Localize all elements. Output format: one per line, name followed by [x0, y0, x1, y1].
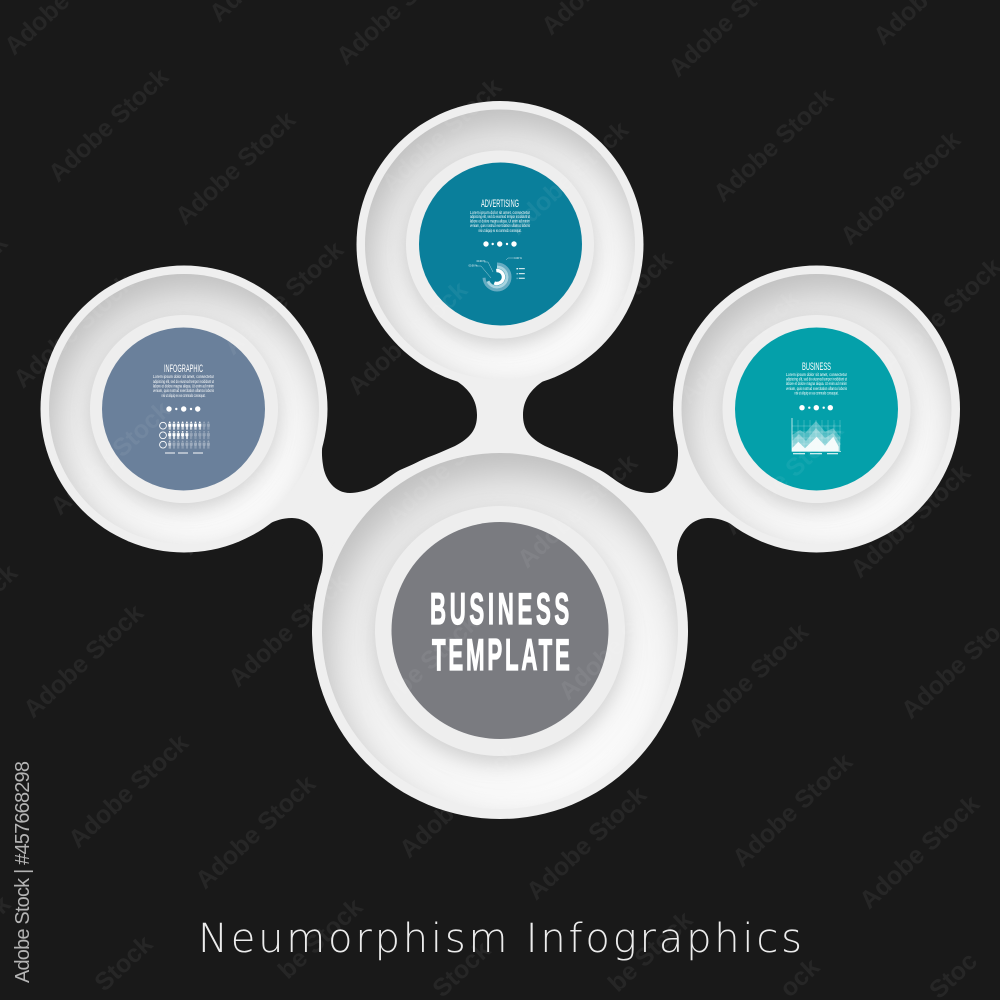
- people pictogram rows: [160, 422, 210, 454]
- watermark pattern: be Stock: [603, 906, 698, 997]
- watermark pattern: Adobe Stock: [835, 126, 966, 250]
- area chart: [792, 418, 841, 454]
- watermark pattern: Adobe Stock: [45, 396, 176, 520]
- watermark pattern: Adobe Stock: [727, 748, 858, 872]
- text block: advertising: veniam, quis nostrud exercitation ullamco laboris: [470, 223, 530, 228]
- watermark pattern: Adobe Stock: [547, 246, 678, 370]
- watermark pattern: Adobe Stock: [718, 416, 849, 540]
- watermark pattern: be Stock: [273, 893, 368, 984]
- text block: infographic: adipiscing elit, sed do eiusmod tempor incididunt ut: [153, 379, 215, 384]
- text block: business: nisi ut aliquip ex ea commodo consequat.: [794, 390, 838, 396]
- text block: infographic: veniam, quis nostrud exercitation ullamco laboris: [153, 388, 214, 393]
- watermark pattern: Adobe Stock: [854, 790, 985, 914]
- heading: advertising: ADVERTISING: [481, 198, 519, 210]
- heading: business: BUSINESS: [802, 361, 831, 373]
- watermark pattern: Adobe Stock: [8, 269, 139, 393]
- heading: business template: [430, 585, 573, 680]
- watermark pattern: Adobe Stock: [43, 63, 174, 187]
- text block: advertising: Lorem ipsum dolor sit amet, consectetur: [470, 210, 530, 215]
- text block: business: adipiscing elit, sed do eiusmod tempor incididunt ut: [786, 376, 848, 382]
- donut chart: [484, 264, 510, 290]
- watermark pattern: Adobe Stock: [63, 729, 194, 853]
- watermark pattern: Adobe Stock: [683, 618, 814, 742]
- text block: advertising: nisi ut aliquip ex ea commodo consequat.: [478, 228, 522, 233]
- text block: advertising: labore et dolore magna aliqua. Ut enim ad minim: [470, 219, 530, 224]
- text block: business: labore et dolore magna aliqua. Ut enim ad minim: [786, 381, 847, 386]
- text block: business: [786, 372, 848, 396]
- heading: business template: BUSINESS: [430, 585, 573, 634]
- watermark pattern: Adobe Stock: [175, 436, 306, 560]
- dots: advertising: [483, 241, 517, 247]
- watermark pattern: Adobe Stock: [845, 459, 976, 583]
- circle: advertising: [356, 101, 644, 382]
- text block: advertising: adipiscing elit, sed do eiusmod tempor incididunt ut: [470, 214, 530, 219]
- text block: business: veniam, quis nostrud exercitation ullamco laboris: [786, 386, 847, 391]
- watermark pattern: Adobe Stock: [353, 609, 484, 733]
- donut labels and legend: 00.00 %: [469, 264, 478, 268]
- dots: infographic: [166, 406, 200, 412]
- watermark pattern: Adobe Stock: [380, 406, 511, 530]
- title: Neumorphism Infographics: [198, 916, 802, 962]
- watermark pattern: Adobe Stock: [218, 236, 349, 360]
- dots: business: [799, 405, 833, 410]
- watermark pattern: Adobe Stock: [521, 781, 652, 905]
- stock id label: Adobe Stock | #457668298: [12, 761, 34, 983]
- text block: infographic: [153, 374, 215, 398]
- donut labels and legend: 0.00 %: [514, 257, 523, 260]
- watermark pattern: Adobe Stock: [503, 116, 634, 240]
- text block: business: Lorem ipsum dolor sit amet, consectetur: [786, 372, 847, 377]
- watermark pattern: Adobe Stock: [708, 83, 839, 207]
- watermark pattern: Adobe Stock: [394, 739, 525, 863]
- donut labels and legend: 00.00 %: [477, 260, 486, 263]
- watermark pattern: Adobe Stock: [553, 581, 684, 705]
- watermark pattern: Adobe Stock: [674, 285, 805, 409]
- watermark pattern: Adobe Stock: [342, 276, 473, 400]
- heading: business template: TEMPLATE: [432, 631, 573, 680]
- watermark pattern: Stock: [89, 930, 158, 997]
- text block: infographic: Lorem ipsum dolor sit amet, consectetur: [153, 374, 214, 379]
- watermark pattern: Adobe Stock: [190, 770, 321, 894]
- circle: infographic: [40, 266, 328, 552]
- text block: infographic: nisi ut aliquip ex ea commodo consequat.: [162, 393, 206, 398]
- circle: business: [673, 266, 960, 552]
- watermark pattern: Adobe Stock: [223, 568, 354, 692]
- watermark pattern: Adobe Stock: [376, 73, 507, 197]
- circle: business template: [312, 453, 688, 819]
- watermark pattern: Adobe Stock: [170, 106, 301, 230]
- heading: infographic: INFOGRAPHIC: [164, 363, 203, 375]
- connector shape joining the circles: [200, 367, 800, 640]
- donut labels and legend: [469, 257, 525, 279]
- watermark pattern: Adobe Stock: [18, 599, 149, 723]
- watermark pattern: Adobe Stock: [512, 449, 643, 573]
- text block: infographic: labore et dolore magna aliqua. Ut enim ad minim: [153, 384, 214, 388]
- text block: advertising: [470, 210, 530, 233]
